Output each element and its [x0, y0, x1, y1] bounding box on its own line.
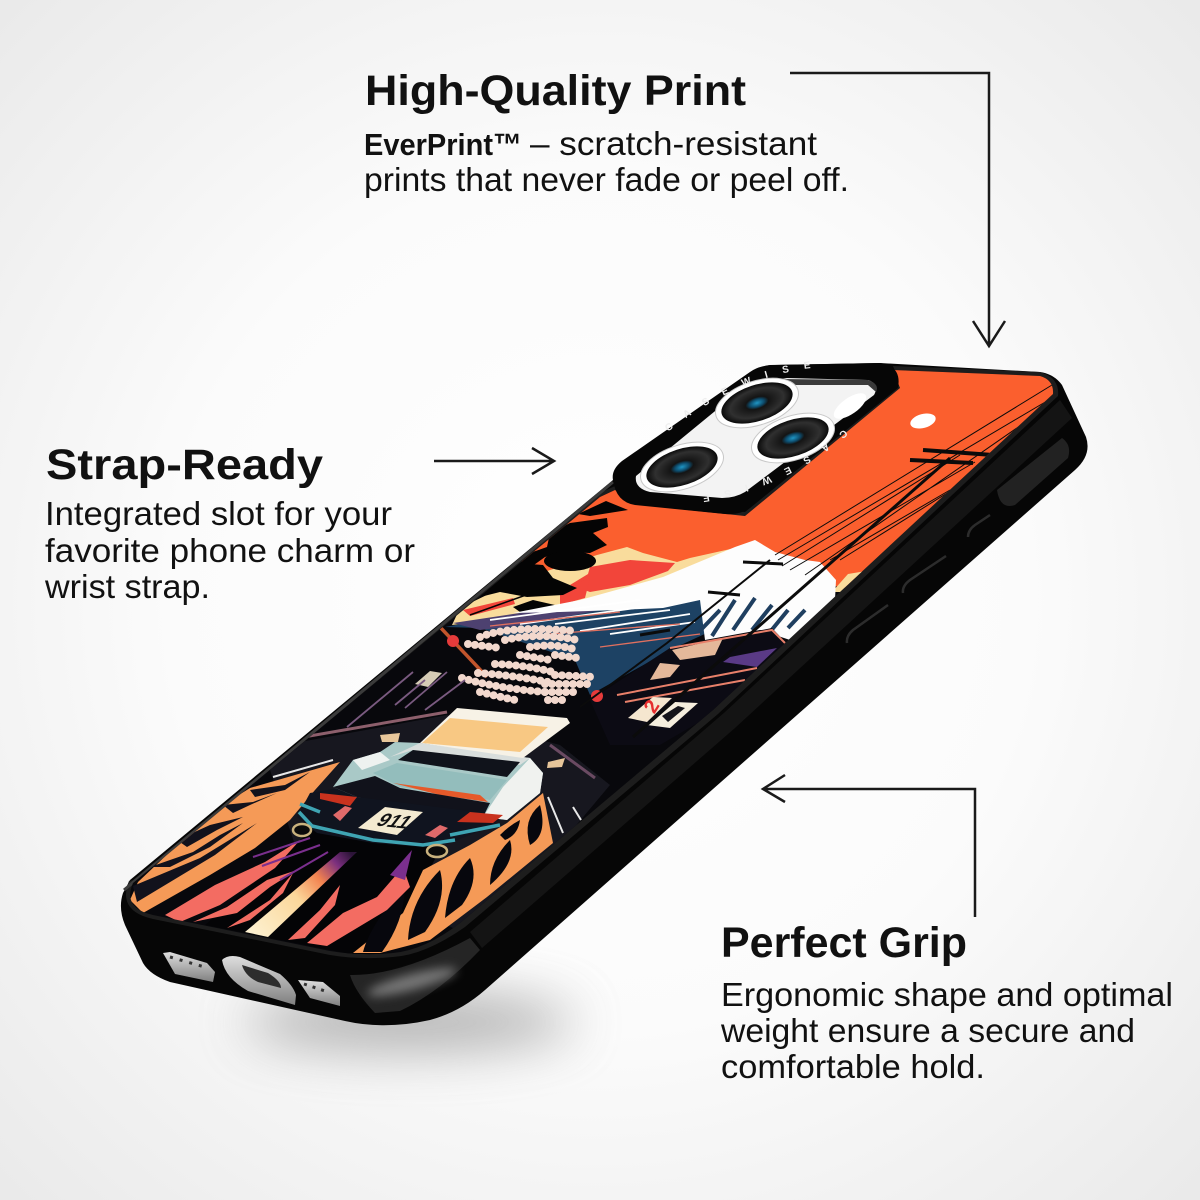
- upper body: [333, 742, 543, 820]
- license plate: [358, 807, 423, 835]
- case bottom sheen: [365, 962, 459, 1002]
- heading: Strap-Ready: [46, 441, 323, 489]
- car roof: [420, 708, 570, 758]
- asphalt below car: [295, 829, 436, 954]
- right fender white: [483, 758, 543, 820]
- right orange ground: [353, 793, 553, 953]
- pillar: [390, 743, 530, 765]
- center stripe: [245, 852, 357, 937]
- background streaks: [347, 672, 465, 727]
- cherry blossoms: [462, 629, 595, 701]
- black trees: [470, 501, 628, 615]
- flash module: [830, 389, 870, 423]
- body text: [364, 125, 849, 198]
- license plate: 911: [371, 810, 417, 833]
- phone shadow: [245, 994, 575, 1050]
- case side band: [470, 400, 1072, 948]
- utility poles and wires: [580, 385, 1052, 737]
- right flames: [307, 876, 410, 946]
- lens top: [709, 369, 805, 437]
- body text: [720, 976, 1173, 1085]
- speaker right: [298, 980, 340, 1006]
- exhausts: [293, 824, 311, 836]
- body text: – scratch-resistant: [530, 125, 817, 162]
- phone case: [121, 363, 1088, 1025]
- left orange ground: [130, 762, 340, 913]
- side mirrors: [380, 733, 400, 742]
- road lane marks: [273, 760, 581, 833]
- rear windows: [398, 750, 520, 777]
- mountain snow: [513, 540, 836, 640]
- body text: [44, 495, 415, 605]
- teal lid: [373, 763, 507, 800]
- callout: perfect grip: [720, 919, 1173, 1085]
- engine lid: [333, 776, 490, 804]
- callout: strap-ready: [44, 441, 415, 605]
- lid orange reflection: [393, 783, 488, 802]
- arrow: grip: [763, 775, 975, 917]
- body text: prints that never fade or peel off.: [364, 161, 849, 198]
- inner top shadow: [780, 379, 877, 392]
- case body: [121, 363, 1088, 1025]
- orange sky: [522, 370, 1054, 588]
- street signs: 2: [640, 696, 664, 717]
- car lower body: [304, 792, 425, 847]
- speaker left: [163, 952, 215, 982]
- body text: Integrated slot for your: [45, 495, 392, 532]
- tail lights: [320, 793, 357, 806]
- purple slope band: [453, 610, 597, 630]
- houses: [616, 628, 786, 703]
- left flames: [165, 838, 328, 928]
- mountain: [445, 540, 836, 695]
- brand text upper: CASEWISE: [666, 362, 810, 430]
- brand text lower: CASEWISE: [703, 430, 847, 502]
- car: [293, 708, 570, 857]
- lens left: [634, 433, 730, 501]
- body text: EverPrint™: [364, 127, 522, 162]
- street pole orange: [440, 627, 487, 677]
- bumper trim: [299, 804, 500, 845]
- body text: wrist strap.: [44, 568, 210, 605]
- camera island: [612, 362, 899, 514]
- body text: comfortable hold.: [721, 1048, 985, 1085]
- case artwork: [130, 370, 1054, 954]
- heading: High-Quality Print: [365, 67, 746, 115]
- callout: high-quality print: [364, 67, 849, 198]
- charging port: [222, 956, 296, 1005]
- left fender highlight: [353, 752, 390, 770]
- strap slot: [997, 438, 1069, 506]
- body text: favorite phone charm or: [45, 532, 415, 569]
- side buttons: [847, 515, 990, 643]
- case rim: [126, 366, 1058, 958]
- roadside rail: [298, 712, 447, 738]
- body text: Ergonomic shape and optimal: [721, 976, 1173, 1013]
- mountain slope: [446, 600, 704, 695]
- car windshield: [422, 718, 548, 752]
- snow ridges: [695, 598, 805, 636]
- street signs: [415, 635, 698, 728]
- lens right: [745, 404, 841, 472]
- road: [270, 715, 610, 940]
- heading: Perfect Grip: [721, 919, 967, 967]
- dark base: [130, 586, 840, 954]
- body text: weight ensure a secure and: [720, 1012, 1135, 1049]
- case bottom highlight: [350, 938, 480, 1013]
- arrow: print: [790, 73, 1005, 346]
- island frame: [613, 363, 899, 514]
- island inner glass: [636, 378, 876, 498]
- case left edge highlight: [124, 482, 613, 890]
- flash highlight: [909, 411, 937, 431]
- arrow: strap: [434, 448, 554, 474]
- clouds: [452, 547, 866, 625]
